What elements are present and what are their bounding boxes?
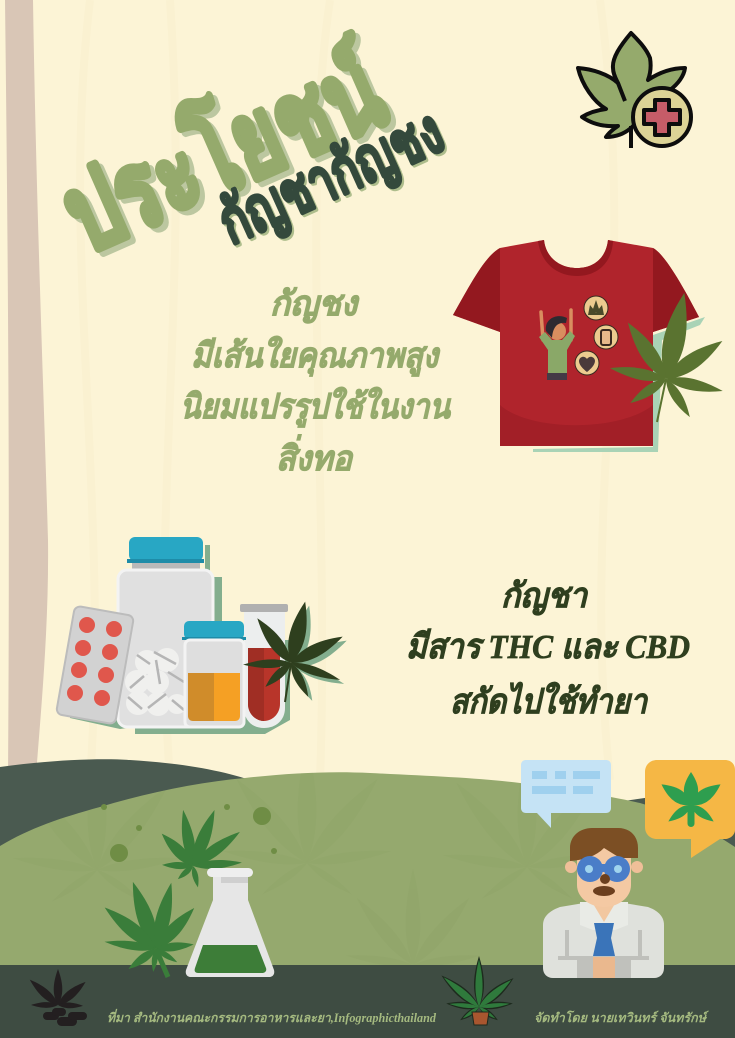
body text: hemp: นิยมแปรรูปใช้ในงาน [180,386,452,428]
body text: hemp [180,286,452,478]
title [45,28,407,280]
body text: cannabis [406,578,690,721]
large bottle [118,537,213,727]
bubbles in air [101,804,277,862]
body text: hemp: มีเส้นใยคุณภาพสูง [191,335,440,377]
illustration: medicine bottles and test tube [56,537,350,734]
footer credit: จัดทำโดย นายเทวินทร์ จันทรักษ์ [534,1010,709,1025]
subtitle [209,98,456,261]
footer source: ที่มา สำนักงานคณะกรรมการอาหารและยา,Infographicthailand [107,1008,437,1025]
left curtain strip [5,0,48,775]
icon: potted plant [438,956,517,1025]
dark leaf [243,600,350,703]
front green hill [0,772,735,970]
test tube [240,604,288,728]
body text: cannabis: กัญชา [501,578,589,616]
scientist [543,828,664,978]
body text: cannabis: มีสาร THC และ CBD [406,628,690,666]
shadows [70,545,290,734]
subtitle: กัญชากัญชง [209,98,454,259]
lower green leaf [100,879,199,977]
body text: hemp: สิ่งทอ [276,434,353,478]
icon: cannabis leaf with medical cross [578,33,691,148]
flask [186,868,274,977]
upper green leaf [158,808,243,888]
icon: black leaf with pills [27,969,88,1026]
footer band [0,965,735,1038]
person on shirt [539,310,575,380]
faint hill leaves [12,743,612,993]
illustration: red t-shirt with leaf [453,240,727,452]
speech bubble: orange with leaf [645,760,735,858]
subtitle: กัญชากัญชง [211,100,456,261]
body text: cannabis: สกัดไปใช้ทำยา [450,681,649,721]
small jar [182,621,246,727]
speech bubble: blue [521,760,611,828]
body text: hemp: กัญชง [270,286,359,324]
leaf on shirt [609,291,727,422]
tablets [125,648,187,716]
back dark hill [0,759,735,860]
blister pack [56,606,134,724]
shirt badges [575,296,618,375]
